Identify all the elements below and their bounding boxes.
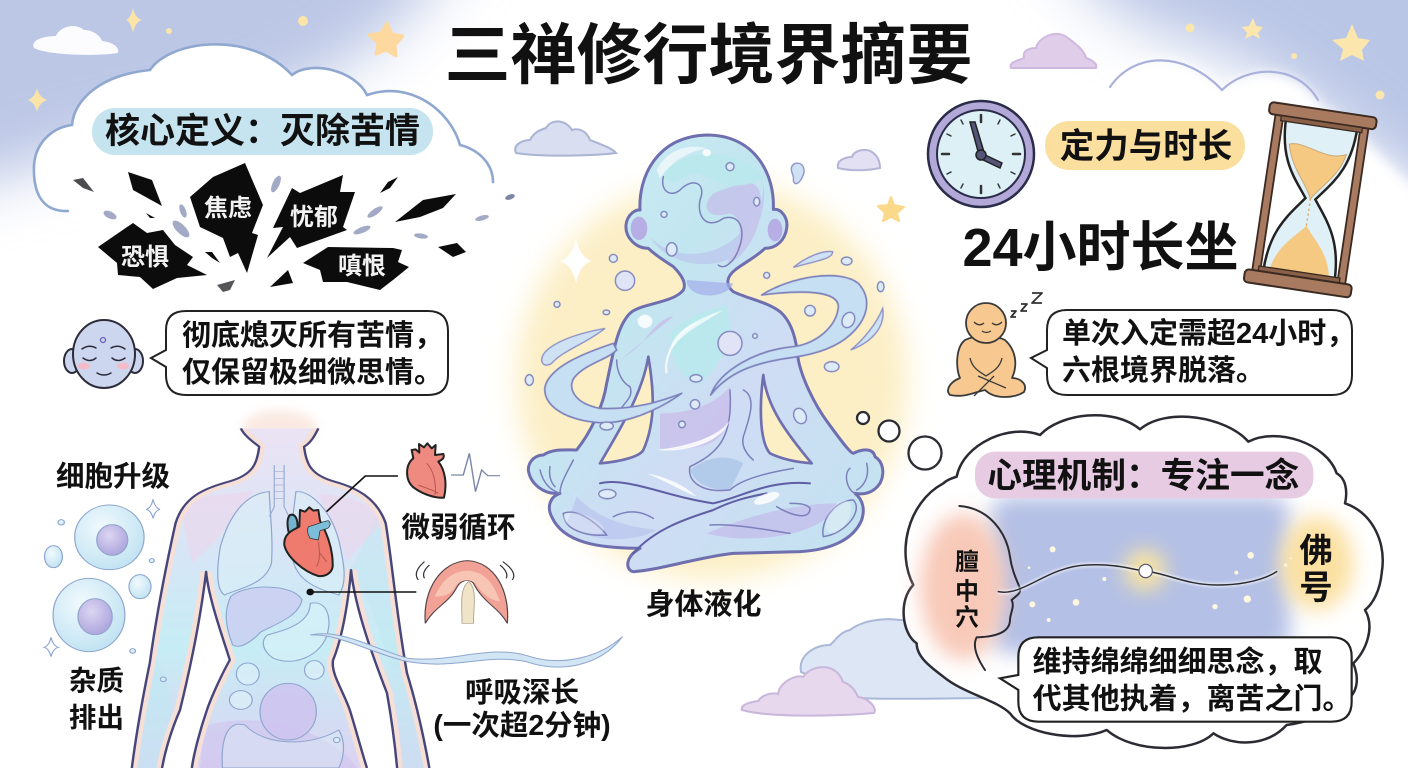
ribbon: left bbox=[545, 343, 682, 423]
label: cell upgrade: 细胞升级 bbox=[56, 461, 170, 493]
icon: diaphragm bbox=[416, 561, 514, 623]
speech bubble: single sitting bbox=[1031, 310, 1352, 395]
small fragments bbox=[73, 172, 466, 292]
label: impurities: 杂质 bbox=[69, 665, 124, 696]
panel: concentration and duration bbox=[928, 60, 1408, 397]
icon: serene face bbox=[64, 320, 143, 388]
panel: psychological mechanism bbox=[904, 415, 1383, 748]
white cloud bbox=[1074, 60, 1408, 300]
ear shading right bbox=[768, 219, 782, 241]
night sky wash bbox=[990, 497, 1290, 653]
ribbon: right bbox=[711, 276, 867, 395]
shard: fear: 恐惧 bbox=[121, 244, 169, 271]
panel: central liquefied body bbox=[515, 121, 908, 621]
bubbles and droplets bbox=[525, 163, 884, 499]
cloud: lower lilac bbox=[742, 667, 875, 716]
sparkles and dots: top left bbox=[28, 8, 308, 112]
leader lines bbox=[307, 476, 416, 595]
panel: core definition bbox=[34, 44, 516, 395]
speech bubble: mechanism bbox=[1000, 637, 1352, 722]
figure: liquid meditator bbox=[525, 135, 884, 572]
heading text: duration: 定力与时长 bbox=[1060, 128, 1232, 166]
thought cloud bbox=[904, 415, 1383, 748]
thought bubbles bbox=[857, 412, 942, 470]
cloud: lower blue bbox=[801, 619, 1000, 699]
cloud stroke bbox=[34, 44, 493, 211]
pulse line bbox=[451, 453, 500, 492]
bubble text: mechanism: 代其他执着，离苦之门。 bbox=[1033, 682, 1351, 715]
label: tanzhong point: 膻 bbox=[955, 549, 979, 576]
lungs bbox=[218, 492, 344, 595]
bubble text: extinguish: 仅保留极细微思情。 bbox=[182, 356, 443, 389]
cloud: centre left bbox=[515, 121, 616, 156]
lower organs bbox=[160, 661, 343, 768]
arm gap: right bbox=[761, 375, 812, 463]
liver bbox=[226, 587, 302, 646]
star specks bbox=[1028, 546, 1292, 622]
ear shading bbox=[631, 217, 647, 240]
yellow glow bbox=[516, 180, 908, 580]
icon: clock bbox=[928, 101, 1034, 207]
shard: hatred bbox=[303, 247, 409, 290]
heading text: core definition: 核心定义：灭除苦情 bbox=[105, 112, 420, 151]
highlights bbox=[560, 147, 856, 539]
icon: cells bbox=[44, 499, 160, 657]
label: weak circulation: 微弱循环 bbox=[401, 512, 516, 544]
shard: anxiety bbox=[190, 163, 263, 273]
arm gap: left bbox=[600, 357, 653, 463]
label: buddha name: 佛 bbox=[1299, 533, 1333, 570]
cloud: white top left bbox=[33, 26, 118, 55]
label: deep breathing: (一次超2分钟) bbox=[433, 710, 611, 742]
bubble text: single sitting: 六根境界脱落。 bbox=[1062, 354, 1265, 387]
big statement: 24小时长坐 bbox=[962, 218, 1239, 278]
shard: fear bbox=[98, 223, 207, 289]
face profile bbox=[959, 506, 1020, 670]
breath ribbon bbox=[310, 634, 622, 667]
peach inner band bbox=[132, 428, 429, 768]
pink glow bbox=[920, 513, 1007, 660]
shard: anxiety: 焦虑 bbox=[204, 195, 252, 222]
background sky: top right bbox=[1050, 0, 1408, 225]
thought thread bbox=[998, 565, 1277, 592]
heading text: mechanism: 心理机制：专注一念 bbox=[987, 458, 1299, 496]
cloud: centre right bbox=[838, 150, 880, 170]
yellow glow bbox=[1280, 517, 1353, 610]
torso fill bbox=[132, 428, 429, 768]
label: tanzhong point: 穴 bbox=[955, 605, 979, 632]
icon: hourglass bbox=[1243, 102, 1377, 298]
background sky: top left bbox=[0, 0, 470, 205]
water wisps bbox=[542, 163, 883, 365]
body colour washes bbox=[567, 154, 837, 539]
inner contour lines bbox=[540, 177, 868, 553]
anatomy figure bbox=[44, 410, 622, 768]
shard: hatred: 嗔恨 bbox=[338, 253, 386, 280]
heading pill: duration bbox=[1045, 121, 1245, 170]
panel: body changes bbox=[44, 410, 622, 768]
sparkle: white bbox=[560, 238, 592, 283]
colour washes bbox=[131, 428, 429, 768]
title: 三禅修行境界摘要 bbox=[444, 18, 972, 92]
bubble text: extinguish: 彻底熄灭所有苦情， bbox=[182, 319, 443, 352]
thought node bbox=[1139, 564, 1152, 578]
heading pill: core definition bbox=[92, 108, 433, 155]
stomach bbox=[263, 603, 329, 661]
label: deep breathing: 呼吸深长 bbox=[465, 677, 579, 709]
label: buddha name: 号 bbox=[1299, 570, 1333, 607]
cloud: lavender top right bbox=[1011, 34, 1096, 68]
shard: depression bbox=[267, 175, 355, 258]
grey fragments bbox=[102, 174, 516, 240]
cloud fill: core definition bbox=[34, 44, 493, 300]
icon: heart bbox=[407, 443, 446, 498]
label: body liquefaction: 身体液化 bbox=[645, 588, 762, 621]
star: top left orange bbox=[369, 23, 403, 56]
trachea bbox=[269, 465, 289, 517]
star: centre right bbox=[878, 197, 904, 221]
label: impurities: 排出 bbox=[69, 702, 124, 733]
label: tanzhong point: 中 bbox=[955, 578, 979, 605]
bubble text: mechanism: 维持绵绵细细思念，取 bbox=[1033, 645, 1323, 679]
stars: top right bbox=[1186, 18, 1384, 100]
icon: inner heart bbox=[284, 507, 333, 576]
bubble text: single sitting: 单次入定需超24小时， bbox=[1062, 317, 1355, 350]
cloud stroke bbox=[1110, 60, 1318, 100]
shard: depression: 忧郁 bbox=[290, 204, 338, 231]
icon: sleeping meditator bbox=[948, 293, 1042, 397]
speech bubble: extinguish bbox=[151, 311, 448, 395]
knot glow bbox=[1124, 549, 1166, 591]
heading pill: mechanism bbox=[975, 452, 1313, 498]
body outline bbox=[132, 428, 429, 768]
